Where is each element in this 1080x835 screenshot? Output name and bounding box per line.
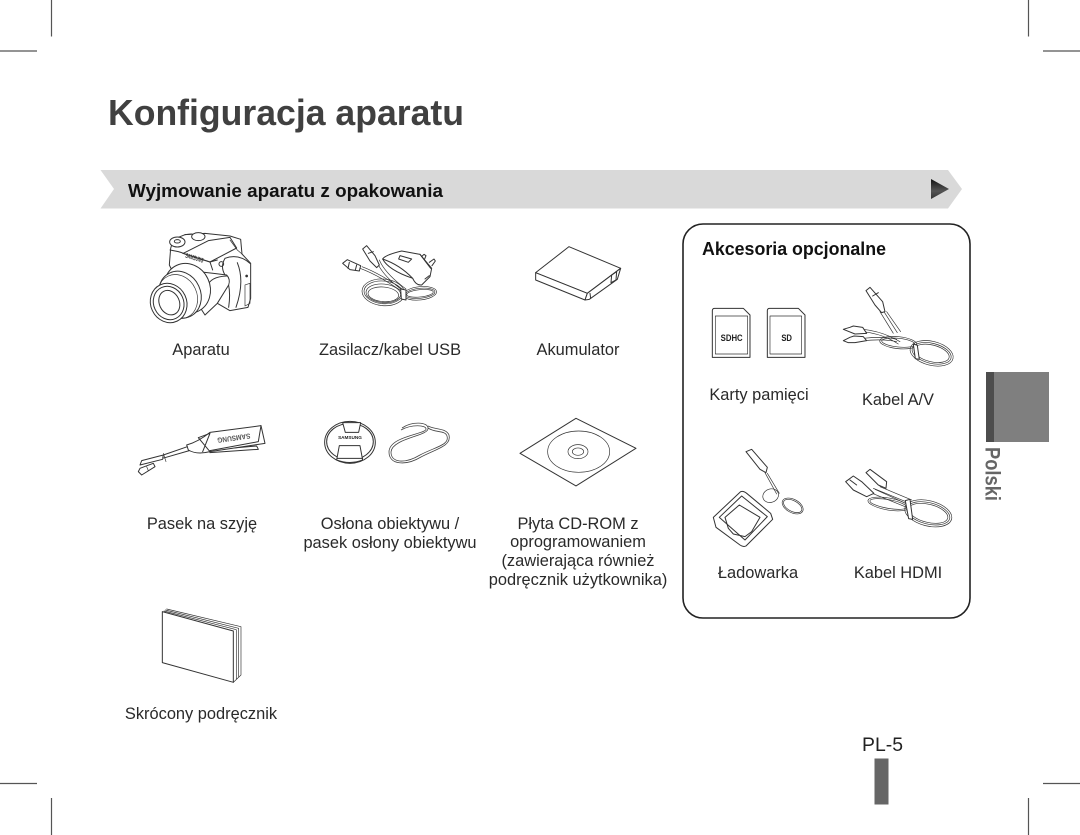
label: Skrócony podręcznik: Skrócony podręcznik: [125, 705, 278, 723]
icon: SD card: [767, 308, 805, 357]
icon: battery charger: [713, 449, 806, 546]
icon: charger and USB cable: [343, 246, 437, 307]
section heading text: Wyjmowanie aparatu z opakowania: [128, 181, 444, 201]
label: Płyta CD-ROM: Płyta CD-ROM z: [517, 515, 639, 533]
icon: camera: [144, 233, 251, 329]
icon: HDMI cable: [846, 469, 955, 531]
language tab: [980, 372, 1049, 501]
panel: optional accessories: [683, 224, 970, 618]
panel heading: Akcesoria opcjonalne: [702, 239, 886, 259]
icon: SDHC card: [712, 308, 750, 357]
icon: camera: SAMSUNG: [184, 253, 204, 265]
label: Zasilacz/kabel USB: Zasilacz/kabel USB: [319, 341, 461, 359]
label: Kabel A/V: Kabel A/V: [862, 391, 934, 409]
icon: quick start guide: [162, 609, 241, 682]
label: Ładowarka: Ładowarka: [718, 564, 799, 582]
label: Osłona obiektywu / pasek osłony obiektywu: [303, 515, 477, 552]
icon: lens cap: SAMSUNG: [338, 435, 362, 440]
label: Płyta CD-ROM: (zawierająca również: [501, 552, 655, 570]
icon: neck strap: SAMSUNG: [216, 431, 251, 445]
section heading band: [100, 170, 962, 208]
label: Kabel HDMI: Kabel HDMI: [854, 564, 942, 582]
icon: AV cable: [843, 287, 956, 370]
label: Aparatu: Aparatu: [172, 341, 230, 359]
label: Płyta CD-ROM: oprogramowaniem: [510, 533, 646, 551]
icon: neck strap: [138, 426, 265, 475]
label: Płyta CD-ROM: [489, 515, 667, 589]
label: Akumulator: Akumulator: [537, 341, 620, 359]
title: Konfiguracja aparatu: [108, 92, 464, 133]
icon: lens cap: [325, 421, 375, 463]
icon: CD-ROM in sleeve: [520, 418, 636, 486]
label: Pasek na szyję: Pasek na szyję: [147, 515, 257, 533]
language label: Polski: [980, 447, 1004, 501]
label: Osłona obiektywu / pasek osłony obiektywu: Osłona obiektywu /: [321, 515, 460, 533]
page marker bar: [874, 758, 888, 804]
icon: SDHC card: SDHC: [721, 333, 743, 343]
icon: SD card: SD: [781, 333, 792, 343]
label: Osłona obiektywu / pasek osłony obiektywu: pasek osłony obiektywu: [303, 534, 477, 552]
icon: battery: [536, 247, 621, 300]
label: Płyta CD-ROM: podręcznik użytkownika): [489, 571, 667, 589]
page number: PL-5: [862, 735, 903, 756]
label: Karty pamięci: Karty pamięci: [709, 386, 809, 404]
icon: lens cap strap: [389, 423, 449, 463]
icon: next arrow: [931, 179, 949, 199]
